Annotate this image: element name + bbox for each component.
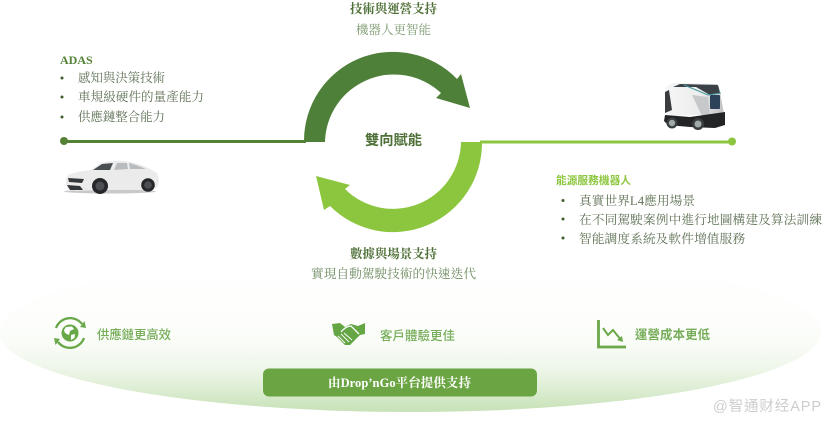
title: technology and operations support: 技術與運營支持: [350, 1, 437, 16]
timeline: dark green line: [60, 137, 306, 145]
robot heading: 能源服務機器人: [556, 174, 631, 187]
platform button: 由Drop’nGo平台提供支持: [328, 375, 471, 390]
ADAS list: 感知與決策技術: [78, 70, 165, 85]
ADAS list: 供應鏈整合能力: [78, 109, 165, 124]
title: data and scenario support: 數據與場景支持: [350, 246, 437, 261]
watermark: @智通财经APP: [713, 398, 821, 415]
ADAS list: 車規級硬件的量產能力: [78, 89, 204, 104]
timeline: light green line: [480, 138, 736, 146]
label: supply chain: 供應鏈更高效: [97, 327, 172, 342]
platform button: [263, 368, 537, 396]
ADAS heading: ADAS: [60, 53, 93, 67]
robot list: 智能調度系統及軟件增值服務: [579, 231, 745, 246]
robot list: [562, 193, 822, 246]
icon: delivery robot: [664, 83, 725, 130]
ADAS list: [60, 70, 204, 124]
panel: ADAS: [60, 53, 204, 124]
subtitle: smarter robots: 機器人更智能: [356, 22, 431, 37]
subtitle: fast iteration: 實現自動駕駛技術的快速迭代: [311, 266, 476, 281]
icon: falling chart: [598, 320, 626, 347]
arrow: light green arc: [316, 142, 482, 232]
robot list: 真實世界L4應用場景: [579, 193, 695, 208]
robot list: 在不同駕駛案例中進行地圖構建及算法訓練: [579, 212, 822, 227]
label: operating cost: 運營成本更低: [635, 327, 711, 342]
platform ellipse background: [0, 252, 821, 412]
arrow: dark green arc: [304, 52, 470, 142]
label: customer experience: 客戶體驗更佳: [380, 328, 455, 343]
panel: energy service robot: [556, 174, 822, 246]
icon: handshake: [332, 323, 365, 345]
icon: globe with arrows: [54, 318, 86, 348]
center label: 雙向賦能: [365, 132, 422, 149]
icon: car: [64, 161, 159, 194]
